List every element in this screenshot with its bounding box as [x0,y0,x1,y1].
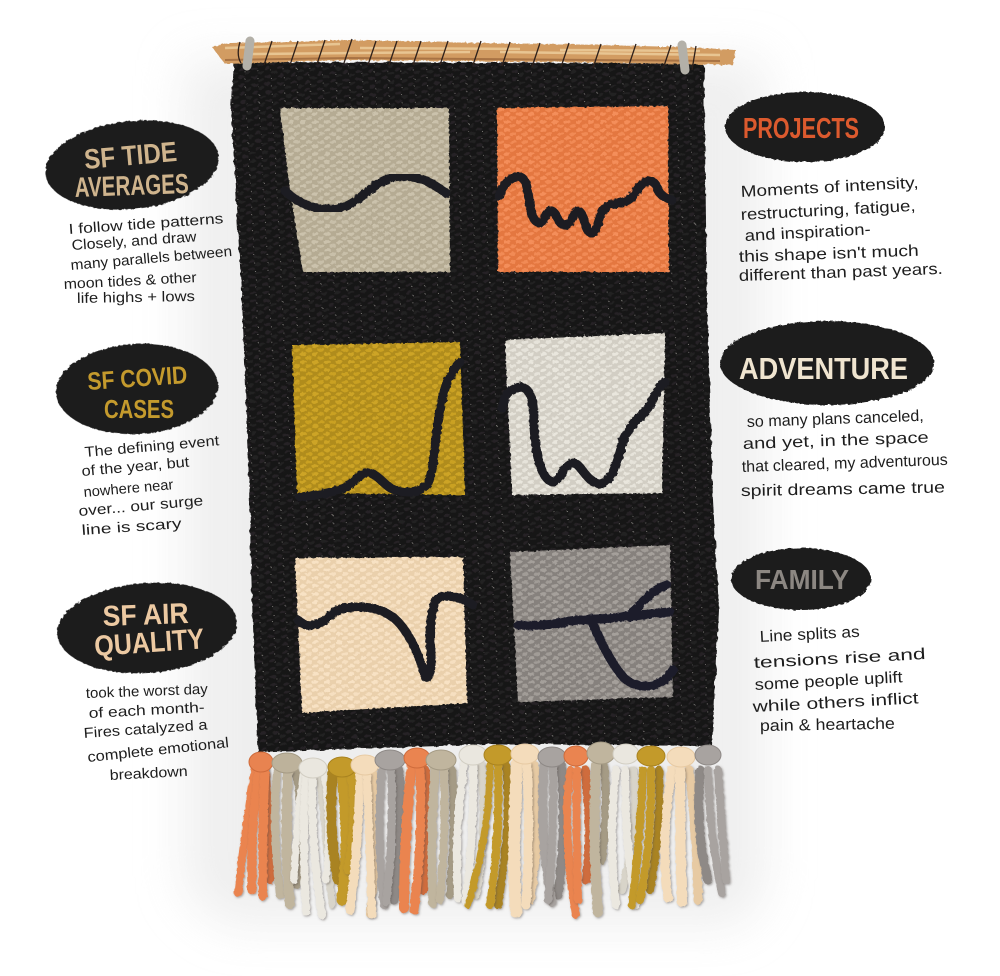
badge: SF tide averages: SF TIDE [83,136,178,175]
text: air quality description: of each month- [88,700,205,722]
text: projects description: restructuring, fatigue, [740,198,916,224]
text: adventure description [741,408,948,500]
tassel 1 orange [238,752,273,896]
text: family description [751,624,926,735]
woven black tapestry body [231,62,719,752]
text: family description: Line splits as [759,624,860,646]
wooden hanging rod [212,39,736,70]
badge: projects [725,92,885,162]
badge: SF air quality [54,577,240,679]
text: air quality description: breakdown [109,764,188,784]
tassel 3 white [294,758,332,915]
text: family description: while others inflict [751,690,920,716]
tassel 6 grey [375,750,405,905]
line: air quality curve [298,596,473,677]
line: projects zigzag [499,177,672,233]
tassel 12 grey [538,747,566,902]
badge: SF covid cases: SF COVID [86,361,188,396]
tassel 10 mustard [468,745,512,905]
text: tide description: many parallels between [70,244,233,274]
callout: SF tide averages [41,112,233,307]
badge: SF tide averages [41,112,223,218]
panel: orange projects square [497,106,672,272]
tassel 14 taupe [587,742,615,912]
text: covid description [78,433,220,539]
tassel 7 orange [404,748,430,910]
text: air quality description [83,682,230,784]
badge: SF tide averages: AVERAGES [74,168,189,203]
text: family description: some people uplift [754,669,904,694]
badge: adventure [720,321,934,405]
tassel 2 taupe [272,753,302,904]
text: projects description [739,175,943,285]
text: tide description: I follow tide patterns [68,211,224,238]
panel: tan tide square [280,108,450,272]
badge: adventure: ADVENTURE [739,351,908,386]
text: tide description: moon tides & other [63,270,197,293]
panel: white adventure square [502,333,665,495]
badge: family [731,548,871,610]
panel: grey family square [510,545,673,702]
text: adventure description: spirit dreams came true [741,479,945,500]
badge: SF covid cases [54,340,220,438]
badge: SF air quality: QUALITY [93,623,205,663]
tassel 18 grey [695,745,726,893]
callout: projects [725,92,943,285]
tassel 16 mustard [632,746,665,905]
text: adventure description: and yet, in the space [743,430,929,453]
fringe tassels [238,742,726,915]
text: covid description: nowhere near [83,477,174,501]
text: family description: pain & heartache [760,716,895,735]
text: tide description: life highs + lows [77,289,195,307]
text: projects description: and inspiration- [744,221,871,245]
panel: mustard covid square [292,342,465,497]
text: covid description: of the year, but [81,455,190,480]
badge: SF covid cases: CASES [104,394,174,424]
tassel 5 peach [350,755,379,915]
tassel 17 peach [665,747,698,902]
line: covid surge curve [300,362,460,497]
callout: adventure [720,321,948,500]
tassel 11 peach [511,744,539,912]
text: family description: tensions rise and [753,646,926,672]
text: covid description: over... our surge [78,493,204,520]
line: adventure curve [502,382,665,484]
text: projects description: this shape isn't much [739,243,919,266]
badge: family: FAMILY [755,564,849,595]
text: tide description: Closely, and draw [71,229,198,254]
text: covid description: line is scary [81,516,183,539]
text: tide description [63,211,233,307]
tassel 13 orange [564,746,589,915]
text: adventure description: that cleared, my adventurous [742,452,948,476]
badge: SF air quality: SF AIR [102,598,189,633]
text: projects description: Moments of intensity, [740,175,919,201]
tassel 8 taupe [426,750,456,903]
callout: SF covid cases [54,340,220,539]
text: air quality description: Fires catalyzed a [83,717,209,742]
tassel 4 mustard [328,757,356,900]
badge: projects: PROJECTS [743,113,859,145]
panel: peach air quality square [295,557,473,713]
text: adventure description: so many plans canceled, [747,408,924,431]
text: air quality description: complete emotional [87,735,230,766]
callout: SF air quality [54,577,240,784]
text: air quality description: took the worst day [86,682,209,702]
tassel 9 white [457,745,487,902]
line: tide curve [285,177,446,209]
line: family splitting curve [518,585,673,686]
text: projects description: different than past years. [739,261,943,285]
text: covid description: The defining event [84,433,220,461]
tassel 15 white [612,744,639,905]
callout: family [731,548,926,735]
